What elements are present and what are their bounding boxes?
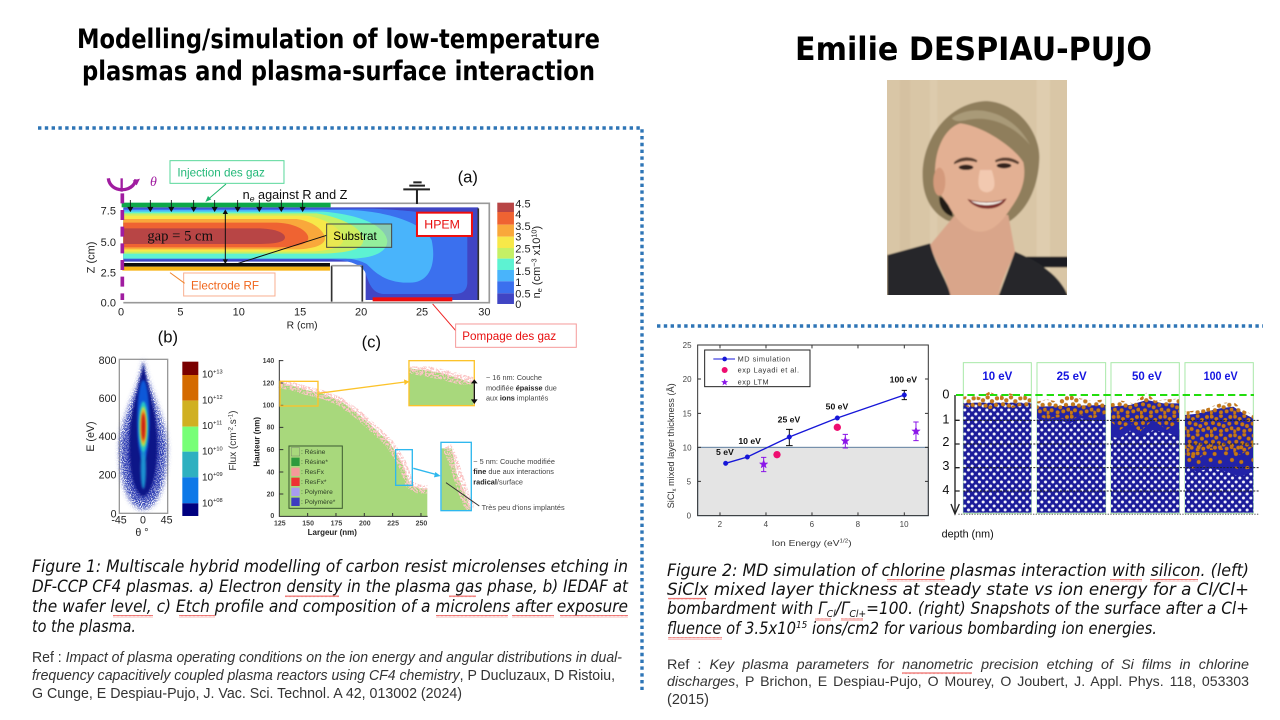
label: gas injection bbox=[170, 161, 284, 202]
grey threshold band bbox=[698, 447, 928, 516]
density colour bar: 10 bbox=[530, 229, 539, 238]
snapshot panel: 25 eV bbox=[1037, 363, 1106, 513]
density colour bar: 1 bbox=[515, 277, 521, 289]
figure 1 caption: DF-CCP CF4 plasmas. a) Electron density in the plasma gas phase, b) IEDAF at bbox=[32, 577, 628, 596]
figure 1c: etch profile bbox=[252, 358, 565, 537]
snapshot panel: 50 eV: 50 eV bbox=[1132, 369, 1162, 383]
annotation: thick layer: modifiée épaisse due bbox=[486, 383, 557, 392]
axis numbers: 10 bbox=[900, 520, 909, 529]
energy labels bbox=[716, 375, 917, 457]
plot title: n bbox=[243, 188, 250, 202]
flux colour bar: 10 bbox=[202, 370, 213, 381]
IEDF axis labels: E (eV) bbox=[85, 421, 97, 452]
pink modified layer bbox=[279, 384, 427, 489]
flux colour bar bbox=[182, 362, 239, 516]
annotation: thin layer: fine due aux interactions bbox=[473, 467, 554, 476]
density colour bar: 3 bbox=[515, 232, 521, 244]
axis numbers: 10 bbox=[683, 443, 692, 452]
axis labels: 10 bbox=[233, 306, 245, 318]
figure 2 caption: fluence of 3.5x10 bbox=[667, 619, 811, 638]
annotation: thick layer bbox=[486, 373, 557, 402]
chart legend: exp Layadi et al. bbox=[738, 366, 800, 375]
flux colour bar: Flux (cm bbox=[228, 432, 239, 471]
density colour bar: 0 bbox=[515, 299, 521, 311]
density colour bar bbox=[497, 198, 544, 311]
figure 1c: etch profile: 60 bbox=[267, 447, 275, 454]
figure 2 reference: discharges, P Brichon, E Despiau-Pujo, O Mourey, O Joubert, J. Appl. Phys. 118, 053303 bbox=[667, 673, 1249, 689]
snapshot panel: 100 eV bbox=[1185, 363, 1253, 513]
flux colour bar: +08 bbox=[213, 498, 223, 504]
axis labels: 5 bbox=[177, 306, 183, 318]
figure 1c: etch profile: Largeur (nm) bbox=[308, 528, 357, 537]
figure 1 reference: Ref : Impact of plasma operating conditions on the ion energy and angular distributions in dual- bbox=[32, 650, 622, 666]
profile legend: : Polymère bbox=[301, 489, 333, 496]
depth axis title: depth (nm) bbox=[942, 528, 994, 540]
flux colour bar: +13 bbox=[213, 369, 223, 375]
profile legend bbox=[289, 446, 342, 508]
pumping bar bbox=[373, 297, 452, 301]
figure 1c: etch profile: 125 bbox=[274, 521, 286, 528]
figure 1 reference: frequency capacitively coupled plasma reactors using CF4 chemistry, P Ducluzaux, D Ristoiu, bbox=[32, 668, 615, 684]
annotation: thin layer: Très peu d'ions implantés bbox=[482, 503, 565, 512]
figure 2 caption bbox=[667, 561, 1249, 639]
label: HPEM: HPEM bbox=[424, 218, 460, 232]
axis labels: R (cm) bbox=[287, 321, 318, 332]
panel letters: (b) bbox=[158, 327, 178, 346]
title: research topic: plasmas and plasma-surface interaction bbox=[82, 56, 595, 87]
density colour bar: −3 bbox=[530, 258, 539, 267]
panel letters bbox=[158, 167, 478, 351]
title: research topic: Modelling/simulation of low-temperature bbox=[77, 24, 600, 55]
IEDF scatter halo bbox=[119, 358, 167, 510]
density colour bar: 2.5 bbox=[515, 244, 531, 256]
figure 1 reference: G Cunge, E Despiau-Pujo, J. Vac. Sci. Technol. A 42, 013002 (2024) bbox=[32, 686, 462, 702]
heading: author name: Emilie DESPIAU-PUJO bbox=[795, 30, 1152, 68]
figure 1 caption: the wafer level, c) Etch profile and composition of a microlens after exposure bbox=[32, 597, 628, 616]
gas injection bar bbox=[122, 203, 331, 207]
figure 2 right: molecular dynamics snapshots bbox=[942, 363, 1259, 540]
label: substrate: Substrat bbox=[333, 230, 377, 243]
figure 2 caption: /Γ bbox=[834, 599, 851, 618]
axis labels: 0 bbox=[118, 306, 124, 318]
IEDF axis labels: 45 bbox=[161, 514, 173, 526]
figure 2 reference: (2015) bbox=[667, 692, 709, 708]
IEDF axis labels: 600 bbox=[99, 393, 117, 405]
figure 1c: etch profile: Hauteur (nm) bbox=[252, 417, 261, 467]
depth numbers: 4 bbox=[942, 483, 949, 497]
figure 2 caption: 15 bbox=[796, 620, 807, 631]
axis titles: ) bbox=[848, 538, 852, 548]
density colour bar: (cm bbox=[531, 267, 543, 288]
figure 2 caption: bombardment with Γ bbox=[667, 599, 839, 618]
snapshot panel: 10 eV bbox=[963, 363, 1031, 513]
annotation: thin layer bbox=[473, 457, 565, 512]
figure 1c: etch profile: 225 bbox=[387, 521, 399, 528]
plot title: against R and Z bbox=[255, 188, 348, 202]
IEDF plot frame bbox=[119, 359, 168, 513]
density colour bar: ) bbox=[531, 226, 543, 229]
figure 1c: etch profile: 100 bbox=[263, 403, 274, 410]
energy labels: 5 eV bbox=[716, 447, 734, 457]
axis numbers: 6 bbox=[810, 520, 815, 529]
yellow region box and zoom bbox=[280, 361, 478, 406]
IEDF core bbox=[129, 362, 157, 497]
annotation: thin layer: radical/surface bbox=[473, 477, 523, 486]
axis labels bbox=[86, 205, 491, 332]
IEDF axis labels: θ ° bbox=[135, 527, 148, 539]
snapshot panel: 50 eV bbox=[1111, 363, 1179, 513]
flux colour bar: ) bbox=[228, 411, 239, 414]
label: gas pumping bbox=[433, 304, 576, 347]
IEDF axis labels: 400 bbox=[99, 431, 117, 443]
axis numbers bbox=[683, 341, 909, 529]
axis labels: 20 bbox=[355, 306, 367, 318]
figure 1a: electron density map bbox=[86, 161, 576, 351]
figure 1c: etch profile: 150 bbox=[302, 521, 314, 528]
contour map bbox=[123, 207, 478, 300]
snapshot panel: 10 eV: 10 eV bbox=[982, 369, 1012, 383]
rotation axis: θ bbox=[150, 175, 157, 190]
snapshot panel: 25 eV: 25 eV bbox=[1057, 369, 1087, 383]
figure 2 caption: Cl+ bbox=[849, 609, 866, 620]
axis numbers: 15 bbox=[683, 409, 692, 418]
IEDF axis labels: 200 bbox=[99, 470, 117, 482]
axis labels: 2.5 bbox=[101, 268, 116, 280]
energy labels: 10 eV bbox=[738, 436, 761, 446]
flux colour bar: 10 bbox=[202, 498, 213, 509]
label: RF electrode bbox=[170, 273, 275, 296]
label: gas injection: Injection des gaz bbox=[177, 167, 265, 180]
axis titles: Ion Energy (eV bbox=[772, 538, 829, 548]
axis labels: 30 bbox=[478, 306, 491, 318]
axes bbox=[279, 360, 428, 516]
flux colour bar: +12 bbox=[213, 395, 223, 401]
axis labels: 5.0 bbox=[101, 237, 116, 249]
density colour bar: 4.5 bbox=[515, 198, 531, 210]
figure 1 caption: Figure 1: Multiscale hybrid modelling of carbon resist microlenses etching in bbox=[32, 557, 628, 576]
figure 1c: etch profile: 200 bbox=[359, 521, 371, 528]
label: gas pumping: Pompage des gaz bbox=[462, 330, 556, 343]
flux colour bar: 10 bbox=[202, 395, 213, 406]
figure 2 left: mixed layer thickness chart: mixed layer thickness (Å) bbox=[666, 383, 676, 489]
depth numbers: 2 bbox=[942, 435, 949, 449]
IEDF axis labels bbox=[85, 355, 173, 539]
title: research topic bbox=[77, 24, 600, 87]
depth numbers: 1 bbox=[942, 412, 949, 426]
flux colour bar: -1 bbox=[229, 413, 235, 419]
depth axis arrow bbox=[951, 395, 960, 514]
figure 2 left: mixed layer thickness chart bbox=[666, 341, 928, 548]
gap annotation bbox=[147, 209, 228, 264]
density colour bar: e bbox=[535, 288, 544, 292]
substrate and RF electrode bbox=[122, 263, 330, 271]
flux colour bar: -2 bbox=[229, 426, 235, 432]
figure 1c: etch profile: 40 bbox=[267, 469, 275, 476]
figure 2 caption: =100. (right) Snapshots of the surface after a Cl+ bbox=[866, 599, 1249, 618]
profile legend: : ResFx* bbox=[301, 479, 327, 486]
axis numbers: 2 bbox=[718, 520, 723, 529]
annotation: thick layer: aux ions implantés bbox=[486, 393, 549, 402]
figure 1c: etch profile: 20 bbox=[267, 491, 275, 498]
density colour bar: 1.5 bbox=[515, 266, 531, 278]
figure 2 caption: Figure 2: MD simulation of chlorine plasmas interaction with silicon. (left) bbox=[667, 561, 1249, 580]
figure 2 reference bbox=[667, 656, 1249, 708]
axis titles: 1/2 bbox=[840, 539, 848, 545]
depth numbers: 0 bbox=[942, 388, 949, 402]
panel letters: (a) bbox=[458, 167, 478, 186]
figure 2 reference: Ref : Key plasma parameters for nanometric precision etching of Si films in chlorine bbox=[667, 656, 1249, 672]
reactor walls bbox=[123, 203, 489, 303]
axis labels: 0.0 bbox=[101, 298, 116, 310]
figure 2 left: mixed layer thickness chart: x bbox=[672, 489, 678, 491]
figure 1 reference bbox=[32, 650, 622, 702]
snapshot panel: 100 eV: 100 eV bbox=[1204, 369, 1238, 383]
cyan region box and zoom bbox=[396, 442, 479, 511]
figure 1b: ion energy angular distribution bbox=[85, 355, 565, 539]
label: RF electrode: Electrode RF bbox=[191, 279, 259, 292]
axis numbers: 0 bbox=[687, 512, 692, 521]
rotation axis bbox=[108, 175, 157, 300]
figure 2 caption: ions/cm2 for various bombarding ion energies. bbox=[807, 619, 1157, 638]
IEDF axis labels: 0 bbox=[140, 514, 146, 526]
axis labels: 7.5 bbox=[101, 205, 116, 217]
figure 2 left: mixed layer thickness chart: SiCl bbox=[666, 491, 676, 508]
plot frame bbox=[698, 345, 928, 516]
figure 1 caption: to the plasma. bbox=[32, 617, 136, 636]
label: substrate bbox=[238, 224, 392, 263]
MD simulation series bbox=[723, 390, 907, 466]
depth numbers: 3 bbox=[942, 459, 949, 473]
flux colour bar: 10 bbox=[202, 472, 213, 483]
chart legend: exp LTM bbox=[738, 378, 769, 387]
panel letters: (c) bbox=[362, 332, 381, 351]
annotation: thin layer: ~ 5 nm: Couche modifiée bbox=[473, 457, 555, 466]
energy labels: 25 eV bbox=[778, 414, 801, 424]
flux colour bar: +10 bbox=[213, 446, 223, 452]
LTM experimental stars bbox=[759, 422, 920, 472]
density colour bar: n bbox=[531, 292, 543, 298]
figure 1c: etch profile: 140 bbox=[263, 358, 274, 365]
figure 1c: etch profile: 0 bbox=[270, 513, 274, 520]
axis labels: 15 bbox=[294, 306, 306, 318]
surface reference line bbox=[956, 392, 1254, 398]
axis numbers: 4 bbox=[764, 520, 769, 529]
IEDF axis labels: 0 bbox=[111, 508, 117, 520]
label: HPEM bbox=[417, 213, 472, 236]
figure 1c: etch profile: 175 bbox=[331, 521, 342, 528]
density colour bar: 3.5 bbox=[515, 221, 531, 233]
density colour bar: 0.5 bbox=[515, 289, 531, 301]
energy labels: 50 eV bbox=[826, 401, 848, 411]
flux colour bar: 10 bbox=[202, 421, 213, 432]
figure 1c: etch profile: 250 bbox=[416, 521, 427, 528]
profile legend: : Résine* bbox=[301, 459, 328, 466]
chart legend bbox=[705, 350, 810, 387]
axis numbers: 25 bbox=[683, 341, 692, 350]
energy labels: 100 eV bbox=[890, 375, 917, 385]
profile legend: : ResFx bbox=[301, 469, 325, 476]
axis labels: 25 bbox=[416, 306, 428, 318]
chart legend: MD simulation bbox=[738, 355, 791, 364]
IEDF axis labels: -45 bbox=[111, 514, 127, 526]
density colour bar: 4 bbox=[515, 209, 521, 221]
plot title: e bbox=[250, 194, 255, 204]
axis numbers: 20 bbox=[683, 375, 692, 384]
axis labels: Z (cm) bbox=[86, 242, 98, 273]
figure 2 caption: Cl bbox=[827, 609, 836, 620]
gap annotation: gap = 5 cm bbox=[147, 229, 214, 245]
green resist profile bbox=[279, 383, 427, 517]
axis numbers: 8 bbox=[856, 520, 861, 529]
figure 2 caption: SiClx mixed layer thickness at steady state vs ion energy for a Cl/Cl+ bbox=[667, 580, 1249, 599]
Layadi experimental points bbox=[773, 424, 841, 458]
flux colour bar: +09 bbox=[213, 472, 223, 478]
gas flow arrows bbox=[128, 200, 305, 211]
ground symbol bbox=[403, 182, 430, 204]
figure 1c: etch profile: 120 bbox=[263, 380, 274, 387]
annotation: thick layer: ~ 16 nm: Couche bbox=[486, 373, 542, 382]
IEDF axis labels: 800 bbox=[99, 355, 117, 367]
density colour bar: x10 bbox=[531, 238, 543, 258]
profile legend: : Résine bbox=[301, 449, 326, 456]
flux colour bar: 10 bbox=[202, 447, 213, 458]
portrait photo bbox=[880, 75, 1080, 308]
density colour bar: 2 bbox=[515, 254, 521, 266]
figure 1 caption bbox=[32, 557, 628, 636]
IEDF haze bbox=[124, 387, 163, 502]
flux colour bar: .s bbox=[228, 419, 239, 427]
depth numbers bbox=[942, 388, 949, 497]
axis numbers: 5 bbox=[687, 477, 692, 486]
profile legend: : Polymère* bbox=[301, 499, 336, 506]
figure 1c: etch profile: 80 bbox=[267, 425, 275, 432]
flux colour bar: +11 bbox=[213, 421, 222, 427]
